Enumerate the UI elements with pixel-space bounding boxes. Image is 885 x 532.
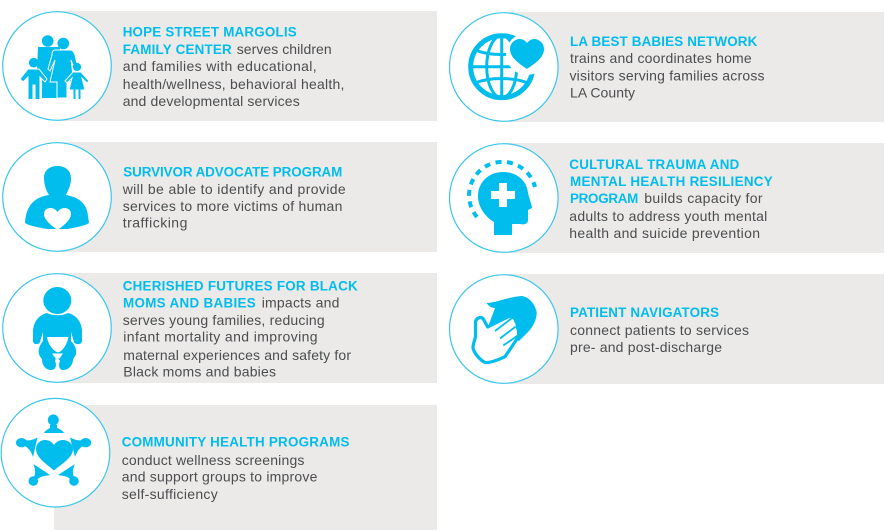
text: Hope Street description: serves children — [237, 41, 332, 57]
panel: Survivor Advocate Program — [3, 142, 437, 252]
icon: person with heart — [25, 166, 89, 230]
text: LA Best Babies description — [570, 34, 764, 100]
icon: family — [20, 35, 89, 100]
icon: head with medical cross — [469, 162, 535, 235]
text: Cultural Trauma description: MENTAL HEALTH RESILIENCY — [570, 174, 773, 189]
text: Patient Navigators description: PATIENT NAVIGATORS — [570, 305, 719, 320]
text: Patient Navigators description: pre- and post-discharge — [570, 339, 722, 355]
text: Community Health description: COMMUNITY HEALTH PROGRAMS — [122, 435, 349, 450]
text: Cultural Trauma description: CULTURAL TRAUMA AND — [569, 157, 740, 172]
text: LA Best Babies description: LA County — [570, 84, 635, 100]
text: Survivor description: will be able to identify and provide — [122, 181, 346, 197]
text: LA Best Babies description: visitors serving families across — [570, 68, 764, 84]
text: Hope Street description: and developmental services — [123, 93, 300, 109]
text: LA Best Babies description: trains and coordinates home — [570, 50, 752, 66]
text: Survivor description: services to more victims of human — [123, 198, 342, 214]
text: Patient Navigators description: connect patients to services — [570, 322, 749, 338]
text: Cherished Futures description: serves young families, reducing — [123, 312, 325, 328]
icon: two hands — [473, 296, 537, 363]
text: Cherished Futures description: maternal experiences and safety for — [123, 347, 351, 363]
panel: Community Health Programs — [1, 398, 437, 530]
text: Cultural Trauma description: PROGRAM — [570, 191, 638, 206]
text: Hope Street description: HOPE STREET MARGOLIS — [123, 25, 297, 40]
text: Cultural Trauma description: builds capacity for — [644, 190, 763, 206]
icon: globe with heart — [470, 33, 548, 98]
text: Hope Street description: health/wellness, behavioral health, — [123, 76, 344, 92]
text: Community Health description: and support groups to improve — [122, 469, 318, 485]
panel: Cultural Trauma and Mental Health Resiliency Program — [450, 143, 884, 253]
text: Cultural Trauma description: adults to address youth mental — [569, 208, 767, 224]
text: Cultural Trauma description — [569, 157, 773, 241]
panel: LA Best Babies Network — [450, 12, 884, 122]
text: Cultural Trauma description: health and suicide prevention — [569, 225, 760, 241]
icon: baby — [33, 287, 82, 370]
panel: Patient Navigators — [450, 274, 884, 384]
text: Survivor description: trafficking — [123, 214, 187, 230]
text: Hope Street description: FAMILY CENTER — [123, 42, 232, 57]
panel: Hope Street Margolis Family Center — [3, 11, 437, 121]
icon: community circle with heart — [16, 414, 91, 486]
panel: Cherished Futures — [3, 273, 437, 383]
text: Cherished Futures description — [123, 279, 358, 380]
text: Hope Street description: and families with educational, — [123, 58, 317, 74]
text: Community Health description — [122, 435, 349, 502]
text: Patient Navigators description — [570, 305, 749, 355]
text: Survivor description: SURVIVOR ADVOCATE PROGRAM — [123, 165, 342, 180]
text: Cherished Futures description: Black moms and babies — [123, 364, 276, 380]
text: Cherished Futures description: infant mortality and improving — [123, 329, 318, 345]
text: Cherished Futures description: CHERISHED FUTURES FOR BLACK — [123, 279, 358, 294]
text: Cherished Futures description: MOMS AND BABIES — [123, 296, 256, 311]
text: Community Health description: self-sufficiency — [122, 486, 218, 502]
text: Survivor description — [122, 165, 346, 230]
text: Hope Street description — [123, 25, 344, 109]
text: Cherished Futures description: impacts and — [262, 295, 339, 311]
text: Community Health description: conduct wellness screenings — [122, 452, 304, 468]
text: LA Best Babies description: LA BEST BABIES NETWORK — [570, 34, 758, 49]
